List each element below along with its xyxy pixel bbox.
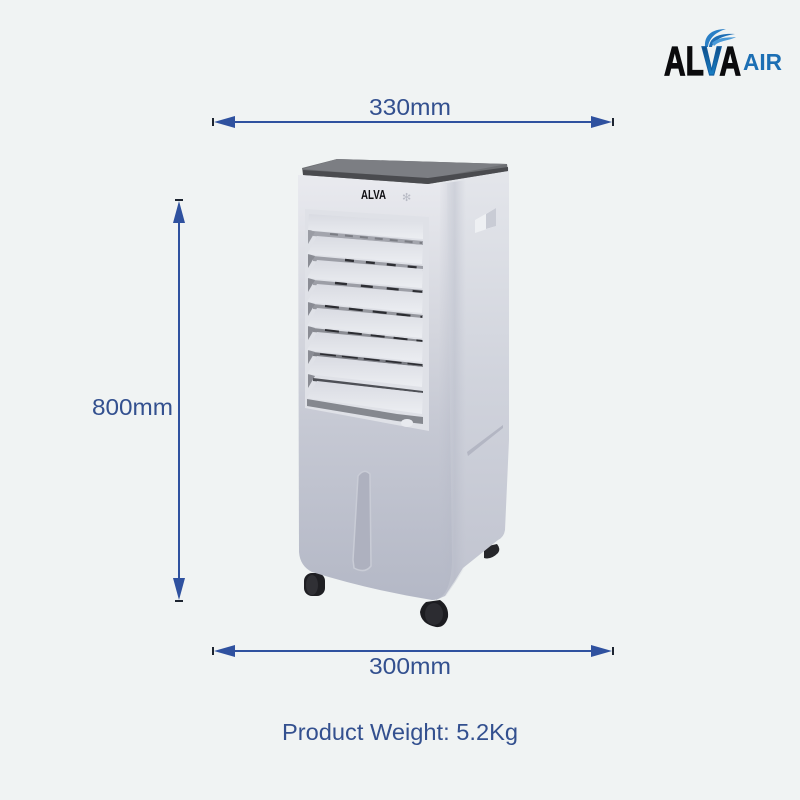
louver slat 4 — [307, 284, 423, 319]
front left caster — [304, 573, 325, 596]
side groove — [467, 425, 503, 456]
panel knob — [401, 419, 413, 427]
louver slat 5 — [307, 308, 423, 343]
brand label ALVA: ALVA — [361, 187, 386, 202]
arrow: bottom width — [212, 645, 614, 657]
arrow: top width — [212, 116, 614, 128]
label 300mm: 300mm — [369, 653, 451, 679]
label 800mm: 800mm — [92, 394, 173, 420]
logo air text: AIR — [743, 49, 782, 75]
cooler side face — [436, 168, 509, 600]
louver slat 3 — [307, 260, 423, 295]
louver slat 1 — [308, 214, 423, 245]
rear caster — [484, 544, 499, 558]
logo: Alva Air — [664, 29, 782, 84]
water level window — [353, 471, 371, 571]
louver slat 6 — [307, 332, 423, 367]
cooler top lid — [302, 159, 508, 184]
logo wordmark: ALVA — [664, 38, 741, 84]
side handle — [475, 208, 496, 233]
label 330mm: 330mm — [369, 94, 451, 120]
product illustration: air cooler — [298, 159, 509, 627]
louver slat 7 — [308, 374, 315, 388]
louver slat 2 — [307, 236, 423, 271]
front right caster — [420, 600, 448, 627]
width dimension: 330mm — [212, 94, 614, 128]
bottom louver strip — [307, 399, 423, 424]
logo wave swoosh — [705, 29, 736, 47]
cooler front face — [298, 175, 452, 600]
product weight: Product Weight: 5.2Kg — [282, 719, 518, 745]
arrow: height — [173, 199, 185, 602]
icon: snowflake button: ✻ — [402, 192, 411, 204]
depth dimension: 300mm — [212, 645, 614, 679]
louver panel — [305, 209, 429, 431]
louver slat 8 — [307, 378, 423, 414]
front to side corner shade — [438, 180, 466, 598]
height dimension: 800mm — [92, 199, 185, 602]
